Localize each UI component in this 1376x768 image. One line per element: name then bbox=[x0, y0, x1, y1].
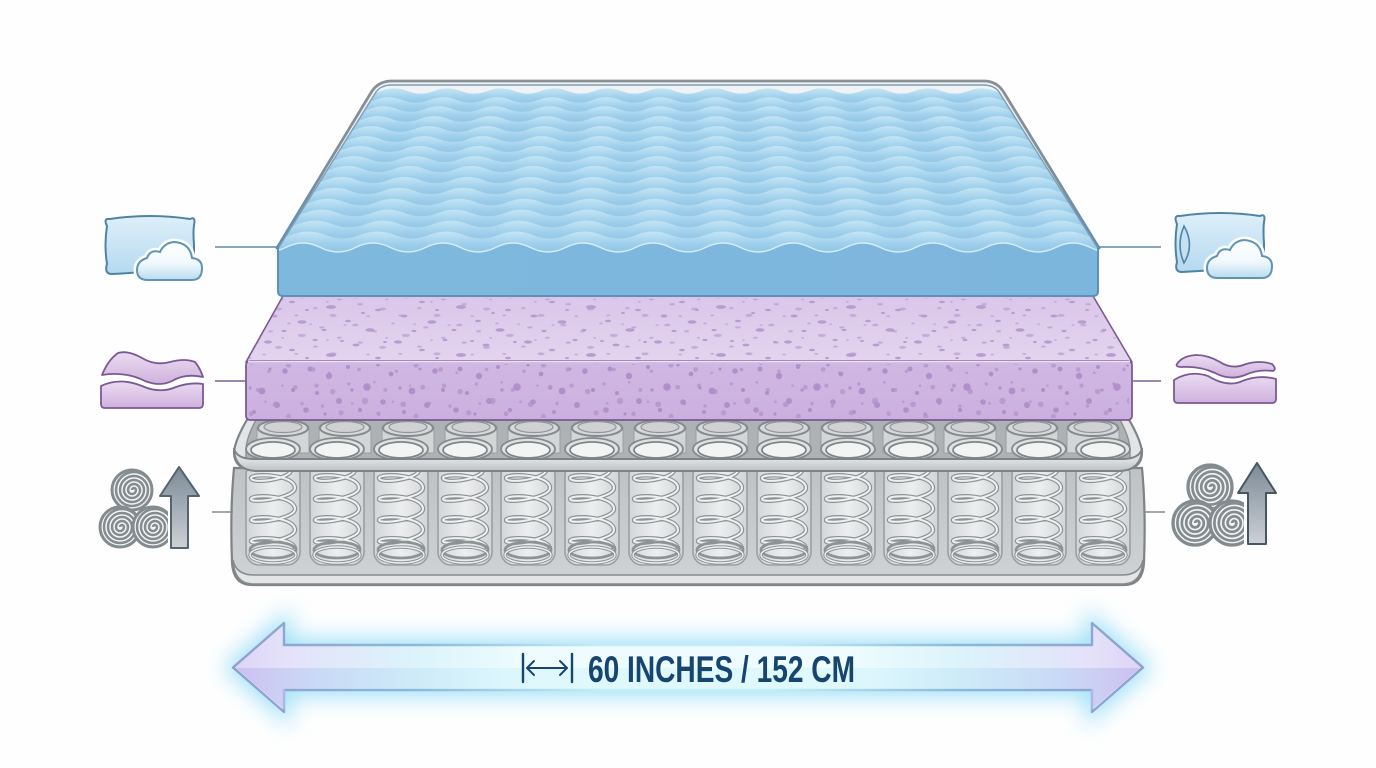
width dimension arrow bbox=[233, 623, 1143, 712]
layer: wavy blue gel foam bbox=[276, 80, 1100, 297]
leader line: top layer left bbox=[215, 246, 278, 248]
arrow lower shading bbox=[236, 668, 1140, 710]
layer: perforated purple foam bbox=[246, 296, 1132, 420]
leader line: top layer right bbox=[1098, 246, 1161, 248]
layer: pocketed coil springs bbox=[231, 418, 1145, 585]
wavy top surface bbox=[279, 88, 1097, 252]
icon: pillow and cloud, right bbox=[1176, 213, 1272, 278]
blue foam front face bbox=[277, 242, 1099, 297]
icon: fibre rolls and up arrow, left bbox=[100, 467, 199, 548]
leader line: springs right bbox=[1144, 511, 1165, 513]
arrow glow bbox=[233, 623, 1143, 712]
spring unit bottom rim bbox=[233, 560, 1143, 584]
purple foam top face bbox=[246, 296, 1132, 362]
back row coil tops bbox=[257, 420, 1119, 453]
arrow body bbox=[233, 623, 1143, 712]
front band of upper frame bbox=[234, 448, 1142, 471]
icon: contouring foam, left bbox=[101, 352, 203, 408]
purple foam front face bbox=[246, 361, 1132, 420]
spring unit base casing bbox=[231, 468, 1145, 585]
icon: width span bbox=[523, 654, 572, 682]
icon: pillow and cloud, left bbox=[106, 216, 202, 280]
spring unit upper frame bbox=[234, 418, 1142, 470]
grey back frame of top layer bbox=[277, 81, 1099, 248]
leader line: middle layer right bbox=[1132, 380, 1161, 382]
leader line: springs left bbox=[212, 511, 233, 513]
front row coil tops bbox=[246, 438, 1130, 460]
icon: fibre rolls and up arrow, right bbox=[1173, 463, 1276, 545]
pocketed springs row bbox=[246, 462, 1130, 565]
blue side edges bbox=[279, 85, 1097, 247]
dimension label: 60 INCHES / 152 CM bbox=[588, 649, 855, 690]
icon: contouring foam, right bbox=[1174, 355, 1276, 403]
leader line: middle layer left bbox=[215, 380, 246, 382]
